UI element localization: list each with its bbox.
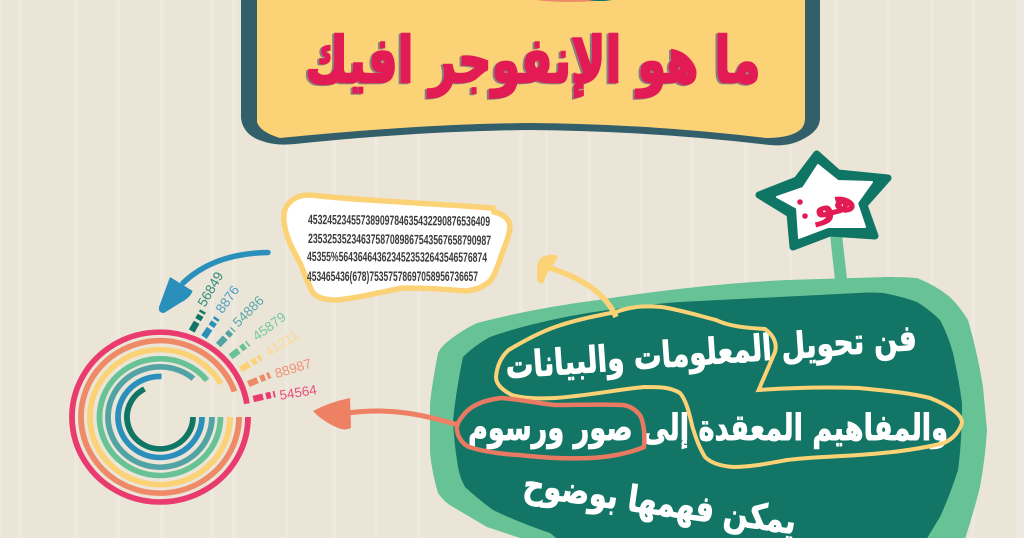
title: ما هو الإنفوجر افيك (304, 25, 758, 99)
definition panel (430, 277, 987, 538)
ring: blue (118, 376, 202, 458)
arrow: blue, numbers to chart (159, 252, 268, 313)
ring: pink (72, 332, 248, 502)
chart tick marks (192, 311, 275, 399)
yellow highlight loop (496, 306, 962, 467)
number line 1: 45324523455738909784635432290876536409 (308, 212, 490, 229)
star badge (759, 154, 888, 247)
red highlight loop (457, 398, 644, 458)
arrow: yellow, panel to numbers (537, 255, 616, 317)
arrow: coral, panel to chart (313, 398, 458, 430)
chart value labels: 56849 (195, 269, 226, 309)
radial chart rings (72, 332, 248, 502)
chart value labels: 8876 (213, 283, 242, 316)
number line 2: 23532535234637587089867543567658790987 (308, 231, 491, 248)
ring: green (100, 359, 221, 475)
ring: teal (108, 367, 212, 467)
chart value labels: 45879 (250, 309, 289, 344)
star label: هو (807, 179, 859, 227)
ring: coral (81, 341, 239, 493)
chart value labels: 88987 (273, 356, 313, 381)
number line 3: 45355%5643646436234523532643546576874 (307, 249, 487, 265)
title banner (241, 0, 820, 145)
star stem (830, 235, 847, 280)
ring: yellow (90, 350, 230, 485)
ring: dark green (127, 389, 193, 449)
chart value labels: 41211 (262, 327, 301, 359)
chart value labels (195, 269, 318, 403)
definition text (468, 318, 948, 538)
title: ما هو الإنفوجر افيك (306, 24, 760, 98)
chart value labels: 54564 (278, 382, 318, 403)
raw numbers bubble (284, 195, 510, 300)
chart value labels: 54886 (230, 293, 267, 330)
number line 4: 453465436(678)75357578697058956736657 (307, 269, 478, 284)
